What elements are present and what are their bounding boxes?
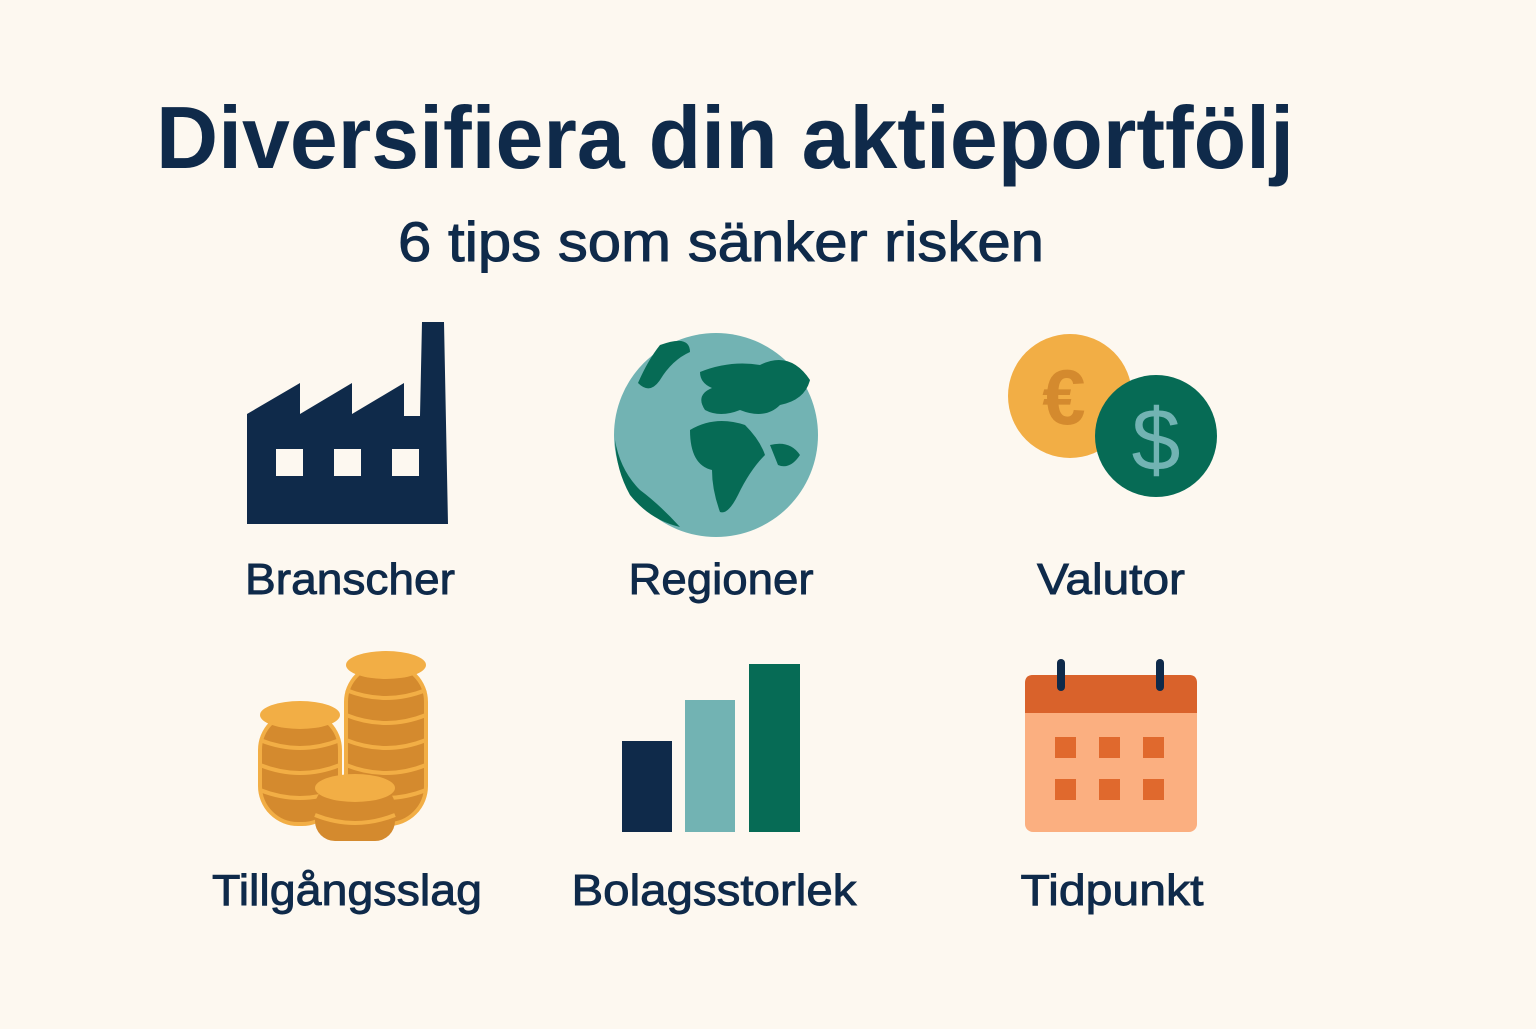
icon: bar chart (622, 664, 800, 832)
label: Tillgångsslag: Tillgångsslag (212, 866, 482, 915)
icon: coin stacks (260, 651, 426, 841)
label: Tidpunkt: Tidpunkt (1020, 866, 1204, 915)
label: Branscher: Branscher (245, 555, 455, 604)
subtitle: 6 tips som sänker risken (398, 210, 1044, 273)
icon: factory (247, 322, 448, 524)
icon: calendar (1025, 659, 1197, 832)
title: Diversifiera din aktieportfölj (156, 88, 1294, 187)
icon: currency coins: $ (1132, 390, 1180, 489)
label: Regioner: Regioner (628, 555, 814, 604)
icon: currency coins (1008, 334, 1217, 497)
icon: currency coins: € (1042, 353, 1086, 441)
icon: globe (614, 333, 818, 537)
label: Valutor: Valutor (1037, 555, 1185, 604)
label: Bolagsstorlek: Bolagsstorlek (572, 866, 858, 915)
